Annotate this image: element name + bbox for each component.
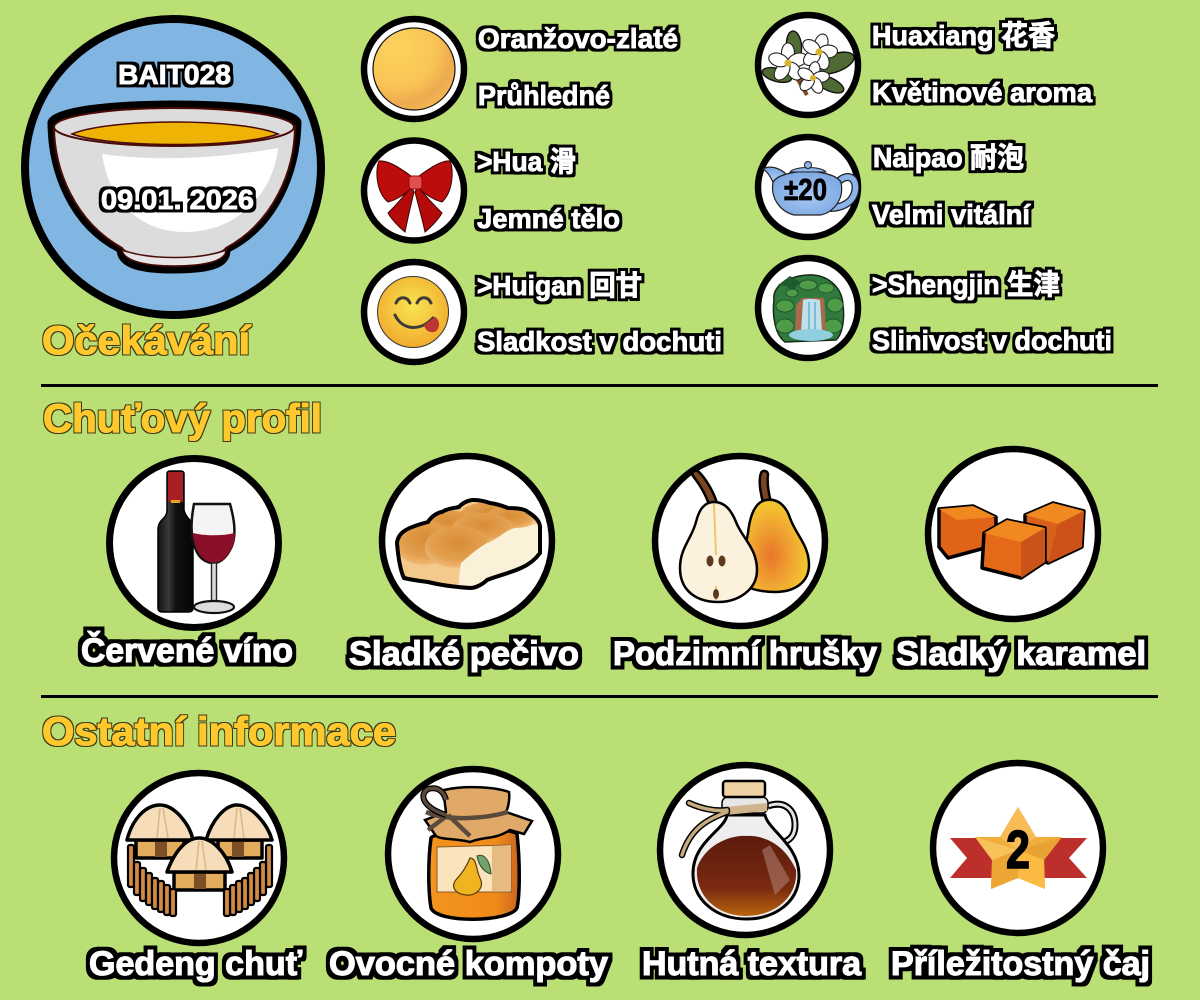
icon: white flowers <box>758 15 858 115</box>
icon: syrup bottle <box>660 765 830 935</box>
item: shengjin <box>758 258 1112 358</box>
text: shengjin: >Shengjin 生津 <box>872 269 1060 300</box>
text: floral aroma: Květinové aroma <box>872 77 1092 108</box>
text: body: Jemné tělo <box>477 203 620 234</box>
item: colour <box>364 19 678 119</box>
text: sweet pastry: Sladké pečivo <box>349 635 579 673</box>
item: dense texture <box>642 765 862 983</box>
icon: tea colour disc <box>364 19 464 119</box>
text: huaxiang: Huaxiang 花香 <box>872 20 1055 51</box>
text: naipao: Naipao 耐泡 <box>873 142 1024 173</box>
badge date: 09.01. 2026 <box>101 184 254 215</box>
icon: jam jar <box>388 769 558 939</box>
icon: pears <box>655 456 825 626</box>
text: occasional tea: Příležitostný čaj <box>891 945 1150 983</box>
icon: star with ribbon <box>933 763 1103 933</box>
text: red wine: Červené víno <box>81 631 293 670</box>
text: sweet aftertaste: Sladkost v dochuti <box>477 326 722 357</box>
icon: caramel cubes <box>928 449 1098 619</box>
item: occasional tea <box>891 763 1150 983</box>
item: red wine <box>81 458 293 670</box>
heading: expectation: Očekávání <box>42 319 252 363</box>
text: vitality: Velmi vitální <box>872 199 1031 230</box>
text: autumn pears: Podzimní hrušky <box>613 635 877 673</box>
text: dense texture: Hutná textura <box>642 945 862 983</box>
icon: teapot <box>758 137 858 237</box>
icon: jungle waterfall <box>758 258 858 358</box>
text: fruit compote: Ovocné kompoty <box>329 945 608 983</box>
icon: thatched huts with fence <box>114 773 284 943</box>
item: huaxiang <box>758 15 1092 115</box>
badge circle <box>25 19 321 315</box>
icon: tea bowl <box>50 103 299 271</box>
item: sweet caramel <box>896 449 1146 673</box>
heading: other information: Ostatní informace <box>42 710 396 754</box>
icon: smiling face <box>364 262 464 362</box>
text: salivation: Slinivost v dochuti <box>872 325 1112 356</box>
icon: red bow <box>364 140 464 240</box>
heading: flavour profile: Chuťový profil <box>43 397 322 441</box>
item: fruit compote <box>329 769 608 983</box>
item: huigan <box>364 262 722 362</box>
panel: tea badge <box>25 19 321 315</box>
icon: teapot: ±20 <box>784 172 827 207</box>
item: sweet pastry <box>349 456 579 673</box>
icon: wine bottle and glass <box>110 458 278 628</box>
icon: milk bread <box>382 456 552 626</box>
item: naipao <box>758 137 1031 237</box>
item: gedeng flavour <box>89 773 303 983</box>
text: gedeng flavour: Gedeng chuť <box>89 945 303 983</box>
badge code: BAIT028 <box>118 59 231 90</box>
text: hua: >Hua 滑 <box>477 146 576 177</box>
item: autumn pears <box>613 456 877 673</box>
icon: star with ribbon: 2 <box>1006 820 1030 880</box>
item: hua <box>364 140 620 240</box>
text: clarity: Průhledné <box>478 80 610 111</box>
text: sweet caramel: Sladký karamel <box>896 635 1146 673</box>
text: huigan: >Huigan 回甘 <box>477 270 642 301</box>
text: colour: Oranžovo-zlaté <box>478 23 678 54</box>
